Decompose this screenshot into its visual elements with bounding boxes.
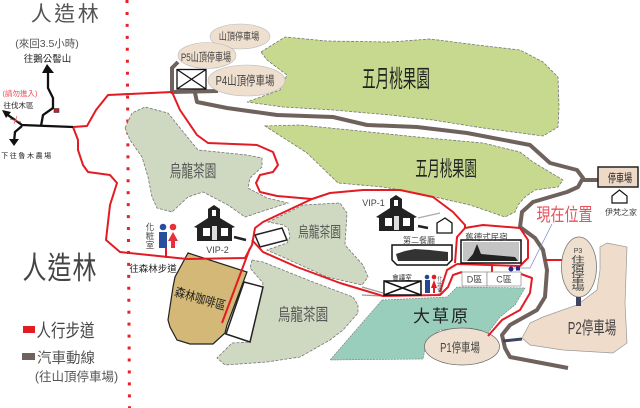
top parking oval: 山頂停車場	[219, 30, 259, 42]
parking connector P2	[503, 339, 522, 341]
parking lot sign: 停車場	[608, 171, 632, 185]
second hall	[392, 245, 452, 265]
top parking oval	[210, 24, 270, 49]
legend: vehicle route	[22, 350, 118, 384]
gray bridge lines	[362, 287, 383, 296]
trail note	[15, 38, 79, 65]
small house near parking	[612, 190, 627, 203]
heading: upper forest: 人造林	[31, 3, 101, 26]
zone C	[487, 272, 521, 286]
label: big meadow: 大草原	[413, 307, 470, 326]
P5 oval	[178, 42, 236, 68]
trail note: 往鵝公髻山	[24, 53, 71, 65]
restroom icons west	[159, 224, 178, 248]
label: lower logging yard: 下往魯木農場	[1, 151, 53, 160]
label: orchard upper: 五月桃果園	[362, 66, 430, 93]
no entry label: (請勿進入)	[2, 88, 38, 98]
label: P3: 場	[571, 284, 585, 292]
label: second hall: 第二餐廳	[403, 235, 435, 245]
label: Yifan house: 伊梵之家	[605, 207, 637, 217]
small red sign	[54, 108, 59, 112]
heading: lower forest: 人造林	[23, 251, 97, 286]
restroom icons near meadow: 妝	[437, 281, 443, 289]
P5 oval: P5山頂停車場	[181, 49, 231, 64]
label: forest cafe: 森林咖啡區	[173, 284, 228, 313]
panel: oolong tea garden south	[217, 260, 358, 365]
label: tea garden center: 烏龍茶園	[298, 223, 341, 240]
P4 oval: P4山頂停車場	[216, 73, 274, 88]
label: tea garden south: 烏龍茶園	[278, 306, 328, 325]
label: meeting room: 會議室	[392, 272, 412, 282]
panel: big meadow	[330, 287, 525, 360]
trail branch roads	[5, 72, 73, 142]
panel: upper peach orchard	[247, 37, 559, 136]
no entry label	[2, 88, 38, 124]
panel: oolong tea garden northwest	[125, 107, 288, 217]
label: VIP-1: VIP-1	[362, 198, 385, 208]
label: P3: 住	[571, 254, 585, 265]
restroom icons near meadow: 化	[437, 275, 443, 283]
parking lot sign	[598, 167, 638, 187]
vehicle route	[172, 62, 598, 368]
legend: vehicle route: (往山頂停車場)	[35, 369, 118, 384]
building: main hall	[461, 240, 521, 263]
label: current location: 現在位置	[537, 205, 592, 225]
arrow heads	[2, 64, 54, 146]
boundary dotted line	[127, 0, 130, 408]
label: P3	[571, 248, 585, 292]
label: makeup room: 粧	[146, 231, 155, 241]
label: tea garden northwest: 烏龍茶園	[170, 162, 216, 182]
label: VIP-2: VIP-2	[206, 245, 229, 255]
zone D: D區	[467, 274, 482, 284]
restroom icons near meadow: 室	[437, 287, 443, 295]
zone C: C區	[496, 274, 512, 284]
label: logging area: 往伐木區	[4, 100, 34, 110]
connector P3 to P2	[576, 297, 581, 306]
label: makeup room: 室	[146, 240, 155, 250]
P1 oval	[424, 328, 500, 365]
label: P3: 宿	[571, 262, 585, 272]
P1 oval: P1停車場	[440, 340, 480, 355]
label: makeup room	[146, 222, 155, 250]
P2 parking area	[522, 243, 627, 353]
legend: vehicle route: 汽車動線	[37, 350, 95, 367]
restroom icons near meadow	[425, 275, 443, 295]
label: P3: 停	[571, 269, 585, 279]
small white house	[437, 218, 452, 233]
crossed box at mountaintop	[177, 70, 206, 89]
legend: walking trail: 人行步道	[37, 322, 94, 341]
trail note: (來回3.5小時)	[15, 38, 79, 50]
panel: oolong tea garden center	[267, 203, 368, 285]
label: forest trail: 往森林步道	[129, 263, 177, 275]
P4 oval	[208, 65, 285, 96]
red walking trails	[73, 92, 562, 336]
building: VIP-2	[194, 205, 246, 241]
panel: forest cafe	[168, 253, 247, 344]
label: orchard lower: 五月桃果園	[415, 156, 477, 181]
label: P3: 車	[571, 277, 585, 285]
current location marker	[508, 224, 552, 272]
label: main hall: 舊德式民宿	[465, 232, 508, 242]
building: VIP-1	[376, 195, 428, 231]
walkway to small house	[418, 213, 440, 218]
meeting room crossed box	[384, 281, 421, 295]
zone D	[462, 272, 487, 286]
label: P3: P3	[574, 248, 582, 255]
P3 parking oval	[562, 237, 596, 297]
white building near cafe	[226, 282, 263, 342]
label: makeup room: 化	[146, 222, 155, 232]
panel: lower peach orchard	[265, 125, 563, 217]
white building center	[255, 228, 287, 247]
label: P2: P2停車場	[568, 319, 616, 339]
